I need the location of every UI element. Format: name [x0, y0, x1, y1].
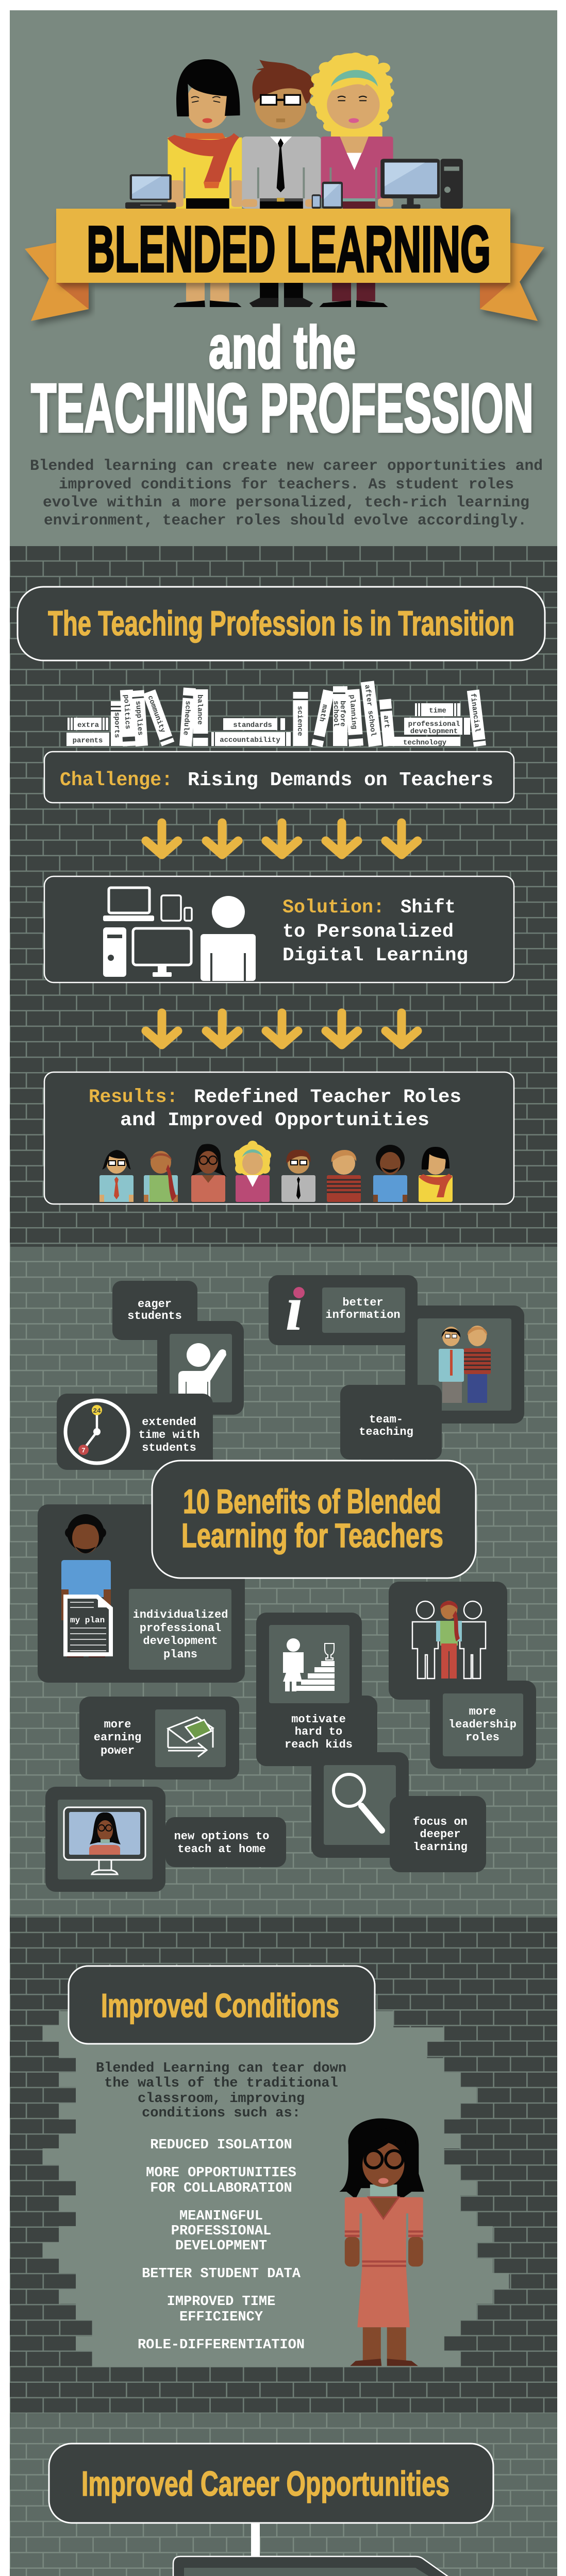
book: balance — [193, 689, 208, 746]
panel: solution: to Personalized — [282, 921, 454, 943]
icon: white tablet and phone — [161, 895, 192, 921]
panel: better information: information — [325, 1309, 401, 1321]
title: and the: and the — [209, 314, 356, 381]
book: art: art — [381, 715, 391, 728]
list: improved conditions: DEVELOPMENT — [175, 2239, 267, 2254]
panel: better information — [269, 1273, 418, 1345]
panel: extended time: time with — [139, 1429, 199, 1442]
panel: better information: better — [342, 1296, 384, 1309]
person: man with glasses and black tie — [281, 1150, 315, 1202]
panel: career brick wall — [10, 2413, 557, 2576]
ribbon tail: left — [25, 243, 89, 321]
book: math: math — [317, 704, 329, 722]
panel: individualized plans: development — [143, 1635, 218, 1648]
book: professional development — [404, 718, 470, 736]
book: standards — [223, 718, 285, 730]
text block: tear down the walls: classroom, improving — [138, 2091, 305, 2107]
icon: teacher on monitor — [64, 1807, 145, 1874]
book: planning — [345, 689, 363, 747]
panel: more earning power: more — [104, 1718, 131, 1731]
person: blonde teacher — [234, 1141, 271, 1202]
ribbon tail: right — [480, 243, 544, 321]
panel: challenge: Challenge: — [60, 769, 173, 791]
panel: results: Results: — [89, 1087, 178, 1108]
panel: eager students: eager — [138, 1298, 172, 1311]
person: teacher with round glasses — [191, 1144, 227, 1202]
icon: magnifying glass — [334, 1774, 382, 1831]
book: planning: planning — [347, 694, 358, 730]
panel: more earning power — [79, 1697, 239, 1780]
book: before school: school — [331, 701, 340, 726]
panel: leadership icon — [389, 1582, 507, 1700]
panel: focus on deeper learning: focus on — [413, 1816, 468, 1828]
list: improved conditions: MEANINGFUL — [179, 2209, 263, 2224]
list: improved conditions: EFFICIENCY — [179, 2310, 263, 2325]
book: politics: politics — [122, 694, 131, 730]
panel: focus on deeper learning — [390, 1796, 486, 1872]
banner: ribbon with main title — [25, 209, 544, 321]
book: extra: extra — [77, 721, 99, 730]
icon: desktop computer — [380, 159, 463, 209]
person: team teacher woman — [439, 1327, 464, 1403]
book: politics — [120, 689, 136, 747]
illustration: stack of demand books — [66, 681, 486, 747]
panel: solution: Digital Learning — [282, 945, 468, 967]
book: sports — [111, 701, 124, 746]
panel: extended time — [57, 1394, 213, 1470]
sign: new options — [173, 2556, 464, 2576]
icon: clock: 24 — [93, 1407, 101, 1415]
list: improved conditions: IMPROVED TIME — [167, 2294, 275, 2310]
panel: team-teaching: teaching — [359, 1426, 413, 1438]
person: leader in green sweater — [436, 1601, 462, 1679]
person: woman with scarf — [419, 1147, 453, 1202]
icon: figure climbing steps to trophy — [283, 1638, 335, 1691]
text block: introduction: environment, teacher roles should evolve accordingly. — [44, 512, 527, 529]
person: team teacher man — [464, 1326, 491, 1403]
book: before school — [331, 686, 347, 746]
text block: introduction: improved conditions for teachers. As student roles — [59, 476, 514, 493]
book: technology — [390, 737, 460, 747]
heading: improved conditions: Improved Conditions — [101, 1987, 339, 2024]
book: extra — [68, 718, 108, 730]
list: improved conditions: FOR COLLABORATION — [150, 2181, 292, 2196]
text block: introduction — [30, 457, 543, 529]
icon: clock — [65, 1400, 128, 1463]
person: teacher with green sweater — [144, 1151, 178, 1202]
panel: more leadership roles: roles — [465, 1731, 500, 1744]
list: improved conditions: BETTER STUDENT DATA — [142, 2266, 301, 2282]
panel: focus magnifier — [311, 1752, 409, 1858]
heading: the teaching profession is in transition — [18, 587, 545, 660]
list: improved conditions: REDUCED ISOLATION — [150, 2138, 292, 2153]
panel: results — [44, 1072, 514, 1204]
panel: solution: Solution: — [282, 897, 385, 919]
book: science — [293, 692, 308, 746]
panel: more earning power: earning — [94, 1731, 141, 1744]
book: professional development: professional — [408, 720, 460, 728]
signpost pole — [251, 2523, 260, 2576]
book: art — [379, 699, 395, 747]
panel: team-teaching — [340, 1385, 442, 1460]
panel: eager students — [112, 1281, 197, 1340]
book: technology: technology — [403, 739, 447, 747]
panel: focus on deeper learning: learning — [413, 1841, 468, 1854]
book: community: community — [145, 694, 167, 734]
panel: challenge — [44, 752, 514, 803]
book: science: science — [295, 706, 304, 736]
heading: 10 benefits of blended learning for teachers — [152, 1461, 476, 1578]
panel: more leadership roles: leadership — [448, 1718, 517, 1731]
illustration: three teachers with devices — [125, 53, 463, 307]
panel: challenge: Rising Demands on Teachers — [188, 769, 493, 791]
heading: improved conditions — [69, 1966, 375, 2044]
list: improved conditions: PROFESSIONAL — [171, 2224, 271, 2239]
icon: white desktop — [103, 927, 191, 977]
icon: clock: 7 — [81, 1447, 86, 1454]
icon: white person — [201, 896, 256, 981]
book: parents — [66, 733, 109, 746]
icon: white laptop — [103, 888, 154, 921]
icon: information i: ı — [286, 1273, 303, 1344]
panel: motivate hard to reach kids — [256, 1613, 377, 1766]
icon: tablet — [322, 182, 343, 209]
panel: individualized plans — [38, 1504, 245, 1683]
person: teacher with my plan: my plan — [70, 1616, 105, 1625]
book: time — [415, 703, 460, 716]
book: math — [311, 689, 335, 747]
book: professional development: development — [410, 727, 458, 736]
heading: 10 benefits of blended learning for teachers: 10 Benefits of Blended — [183, 1482, 441, 1520]
arrows: challenge to solution — [146, 823, 418, 855]
book: supplies — [131, 690, 148, 747]
ribbon face — [56, 209, 510, 283]
book: financial: financial — [469, 693, 481, 733]
panel: individualized plans: plans — [163, 1648, 197, 1661]
text block: tear down the walls: conditions such as: — [142, 2106, 301, 2121]
list: improved conditions: MORE OPPORTUNITIES — [146, 2165, 296, 2181]
panel: motivate hard to reach kids: motivate — [291, 1713, 346, 1726]
text block: introduction: evolve within a more personalized, tech-rich learning — [43, 494, 529, 511]
panel: motivate hard to reach kids: reach kids — [285, 1738, 353, 1751]
panel: intro background — [10, 10, 557, 546]
person: teacher with my plan — [61, 1514, 113, 1657]
teacher: man with glasses and tie — [242, 60, 321, 209]
book: standards: standards — [233, 721, 272, 730]
list: improved conditions — [138, 2138, 305, 2353]
icon: phone — [312, 194, 321, 209]
person: man in striped shirt — [327, 1150, 361, 1202]
panel: benefits brick wall — [10, 1247, 557, 1918]
list: improved conditions: ROLE-DIFFERENTIATION — [138, 2337, 305, 2353]
panel: conditions brick wall — [10, 1918, 557, 2413]
panel: extended time: students — [142, 1442, 196, 1454]
book: time: time — [429, 707, 446, 715]
book: parents: parents — [73, 737, 103, 745]
text block: tear down the walls: the walls of the traditional — [104, 2076, 338, 2091]
teacher: blonde woman with headband — [309, 53, 394, 209]
panel: solution — [44, 876, 514, 982]
panel: more earning power: power — [101, 1744, 135, 1757]
panel: motivate hard to reach kids: hard to — [295, 1725, 342, 1738]
panel: individualized plans: individualized — [133, 1608, 228, 1621]
arrows: solution to results — [146, 1013, 418, 1045]
panel: new options to teach at home: teach at home — [177, 1843, 266, 1856]
book: schedule — [179, 687, 196, 747]
icon: outlined colleagues — [412, 1601, 486, 1679]
book: balance: balance — [195, 694, 204, 725]
panel: eager students: students — [127, 1310, 182, 1323]
book: after school: after school — [362, 684, 377, 737]
panel: more leadership roles: more — [469, 1705, 496, 1718]
book: accountability: accountability — [220, 736, 280, 744]
book: financial — [467, 689, 486, 747]
book: supplies: supplies — [134, 701, 144, 736]
illustration: teacher in coral dress — [339, 2119, 424, 2366]
panel: new options to teach at home: new options to — [174, 1830, 269, 1843]
panel: new options to teach at home — [45, 1787, 286, 1892]
heading: 10 benefits of blended learning for teachers: Learning for Teachers — [181, 1516, 443, 1554]
panel: raised hand icon — [157, 1321, 244, 1415]
teacher: woman with black bob and scarf — [168, 59, 243, 209]
panel: focus on deeper learning: deeper — [420, 1828, 461, 1841]
heading: improved career opportunities — [49, 2444, 493, 2523]
person: teacher with red tie — [99, 1150, 134, 1202]
panel: results: Redefined Teacher Roles — [194, 1087, 461, 1108]
person: man with beard in blue shirt — [373, 1145, 407, 1202]
book: accountability — [211, 732, 291, 746]
panel: extended time: extended — [142, 1416, 196, 1429]
panel: solution: Shift — [401, 897, 456, 919]
book: community — [143, 689, 174, 746]
text block: introduction: Blended learning can create new career opportunities and — [30, 457, 543, 474]
teacher legs and shoes — [173, 282, 388, 307]
text block: tear down the walls — [96, 2061, 346, 2121]
panel: more leadership roles — [430, 1681, 536, 1769]
panel: results: and Improved Opportunities — [120, 1110, 429, 1131]
shape: hole in the brick wall — [43, 2011, 509, 2367]
book: before school: before — [338, 701, 346, 726]
panel: team-teaching: team- — [369, 1413, 403, 1426]
panel: individualized plans: professional — [140, 1622, 221, 1635]
panel: transition brick wall — [10, 546, 557, 1247]
book: sports: sports — [112, 712, 121, 738]
book: after school — [361, 681, 382, 747]
panel: team teaching icon — [405, 1306, 524, 1423]
text block: tear down the walls: Blended Learning can tear down — [96, 2061, 346, 2076]
icon: laptop — [125, 174, 176, 209]
book: schedule: schedule — [181, 701, 192, 736]
icon: envelope with money — [168, 1717, 213, 1757]
